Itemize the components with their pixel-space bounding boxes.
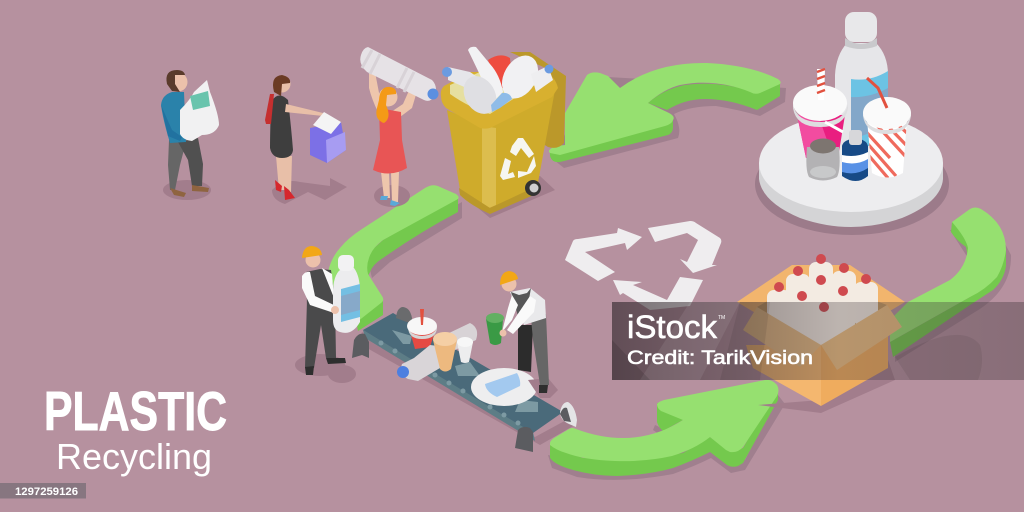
platform with plastic products: [755, 12, 949, 235]
title: PLASTIC: [44, 380, 227, 442]
cardboard box of bottles: [737, 254, 905, 413]
watermark band: [612, 302, 1024, 380]
bin wheel: [525, 180, 541, 196]
plastic items on conveyor: [397, 309, 537, 406]
arrow: bottom green arrow, conveyor to box: [548, 380, 785, 480]
title: Recycling: [56, 436, 212, 477]
plate with blue cup: [471, 368, 537, 406]
blue lotion bottle: [842, 130, 868, 181]
clear plastic bottle: [399, 345, 440, 381]
watermark text: TM: [718, 315, 725, 321]
image id label: 1297259126: [15, 486, 78, 498]
icon: recycling symbol in centre: [565, 221, 721, 310]
clear cup behind: [447, 323, 477, 350]
person: woman lifting large bottle: [360, 47, 438, 207]
large white bottle: [835, 12, 888, 150]
image id label: [0, 483, 86, 498]
watermark text: Credit: TarikVision: [627, 347, 813, 369]
person: man with plastic bag: [161, 70, 219, 200]
recycling bin full of plastic: [441, 47, 566, 218]
person: woman with shopping bag: [265, 75, 347, 204]
worker holding green cup: [486, 271, 558, 398]
small white cup: [457, 342, 473, 363]
arrow: right green arrow, platform to box: [890, 208, 1011, 362]
arrow: left green arrow, workers to bin: [328, 185, 462, 331]
conveyor belt: [352, 307, 577, 452]
pink cup with lid and striped straw: [793, 69, 848, 158]
watermark text: [627, 309, 813, 369]
bin contents: plastic bottles and plates: [442, 47, 554, 120]
red cup: [407, 309, 437, 349]
title: [44, 380, 227, 477]
watermark text: iStock: [627, 309, 718, 345]
orange cone cup: [433, 340, 457, 372]
red striped cup: [860, 78, 911, 178]
icon: recycling symbol on bin: [500, 138, 536, 180]
worker holding bottle: [295, 246, 360, 383]
glass jar: [806, 138, 840, 180]
arrow: top green arrow, platform to bin: [549, 63, 786, 168]
bottles in box: [767, 254, 878, 349]
